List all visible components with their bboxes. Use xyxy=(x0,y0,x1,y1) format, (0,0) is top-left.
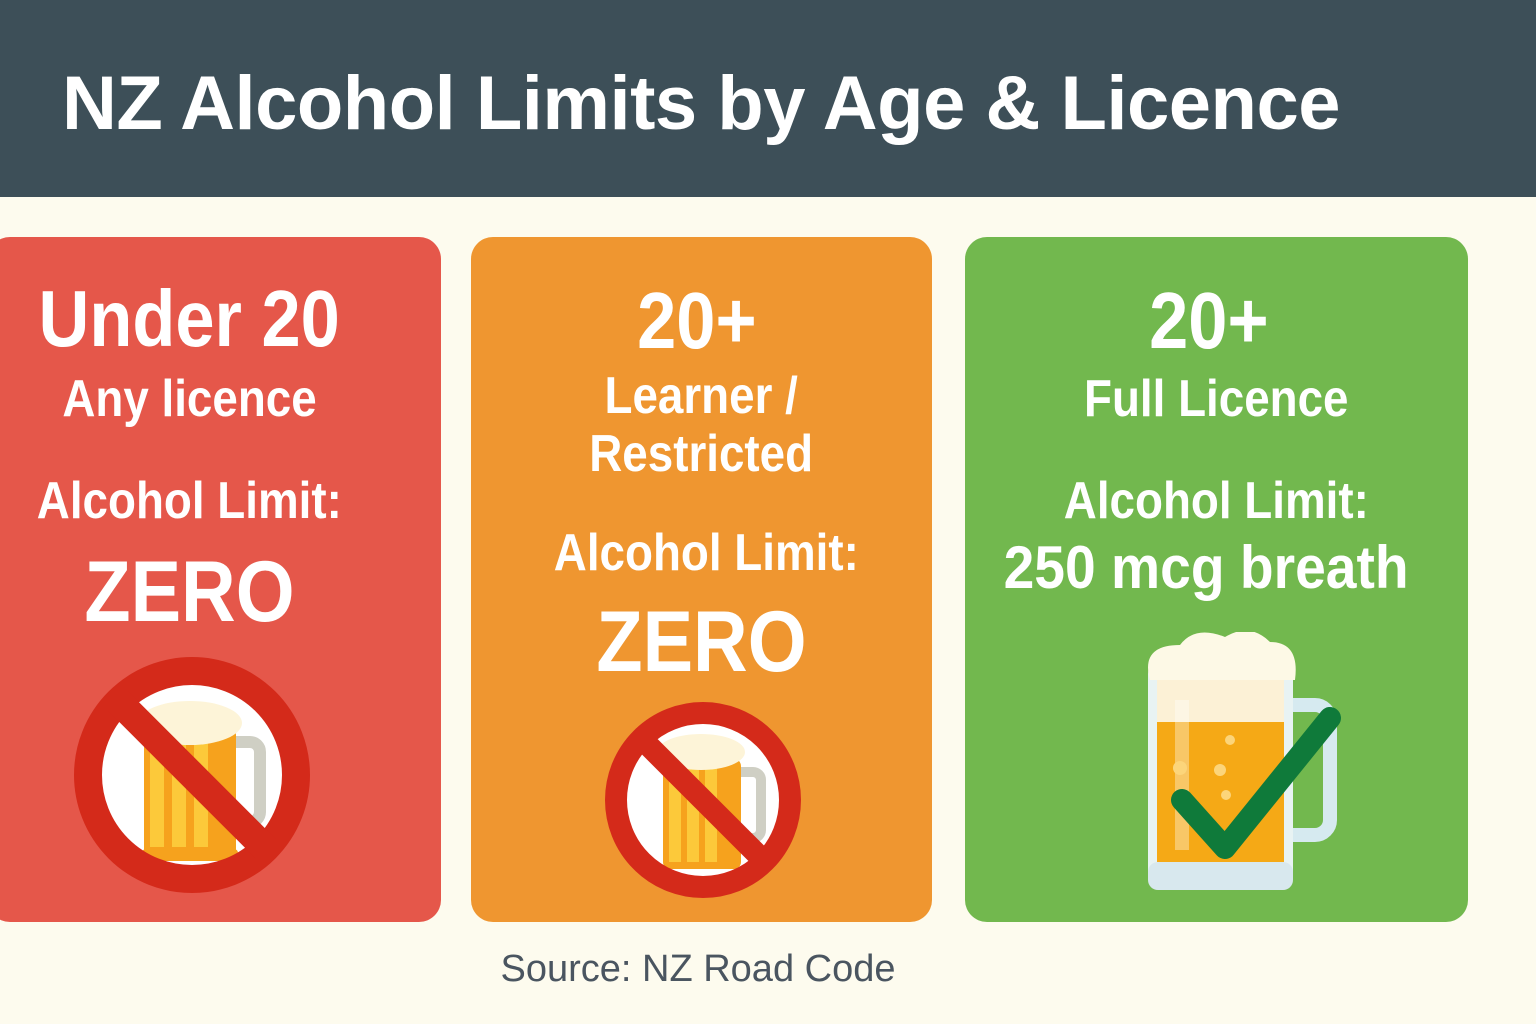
icon: no beer xyxy=(605,702,801,898)
panel: 20+ full licence xyxy=(965,237,1468,922)
panel: 20+ learner/restricted xyxy=(471,237,932,922)
text: any licence: Any licence xyxy=(62,370,317,428)
text: full licence: Full Licence xyxy=(1084,370,1349,428)
heading: Under 20: Under 20 xyxy=(39,274,340,363)
text: alcohol limit: Alcohol Limit: xyxy=(1064,472,1369,530)
text: 250 mcg breath: 250 mcg breath xyxy=(1004,534,1409,601)
text: ZERO: ZERO xyxy=(596,594,807,690)
icon: no beer xyxy=(74,657,310,893)
header bar xyxy=(0,0,1536,197)
heading: 20+: 20+ xyxy=(1149,276,1268,365)
title: NZ Alcohol Limits by Age & Licence xyxy=(62,61,1340,146)
text: ZERO: ZERO xyxy=(84,544,295,640)
text: alcohol limit: Alcohol Limit: xyxy=(37,472,342,530)
text: learner / restricted: Learner / xyxy=(605,367,798,425)
panel: under 20 xyxy=(0,237,441,922)
source note: Source: NZ Road Code xyxy=(500,948,895,990)
icon: beer mug with check xyxy=(1148,632,1341,890)
heading: 20+: 20+ xyxy=(637,276,756,365)
text: learner / restricted: Restricted xyxy=(590,425,813,483)
text: learner / restricted xyxy=(590,367,813,483)
text: alcohol limit: Alcohol Limit: xyxy=(554,524,859,582)
